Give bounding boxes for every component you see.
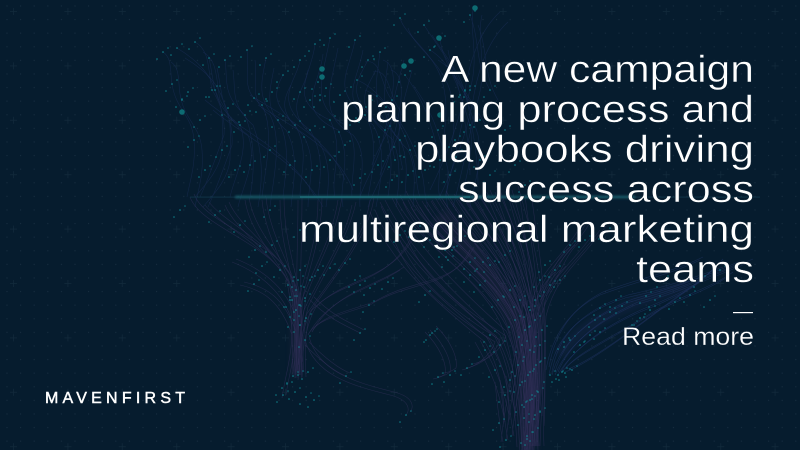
headline: A new campaign (441, 49, 754, 91)
headline: planning process and (341, 89, 754, 131)
small teal nodes (163, 15, 720, 445)
headline: teams (636, 249, 754, 291)
headline (299, 49, 754, 291)
tree trunk glow (295, 215, 690, 450)
headline: multiregional marketing (299, 209, 754, 251)
logo wordmark: MAVENFIRST (45, 390, 185, 407)
horizontal stream (190, 196, 760, 198)
large teal nodes (179, 5, 478, 118)
divider dash (733, 312, 753, 313)
headline: success across (458, 169, 754, 211)
read more link: Read more (622, 323, 754, 351)
headline: playbooks driving (415, 129, 754, 171)
left tree strands (190, 197, 470, 415)
right fan strands (546, 260, 750, 375)
upper scatter strands (163, 5, 500, 197)
network visualization (157, 5, 760, 450)
right tree strands (375, 190, 600, 450)
